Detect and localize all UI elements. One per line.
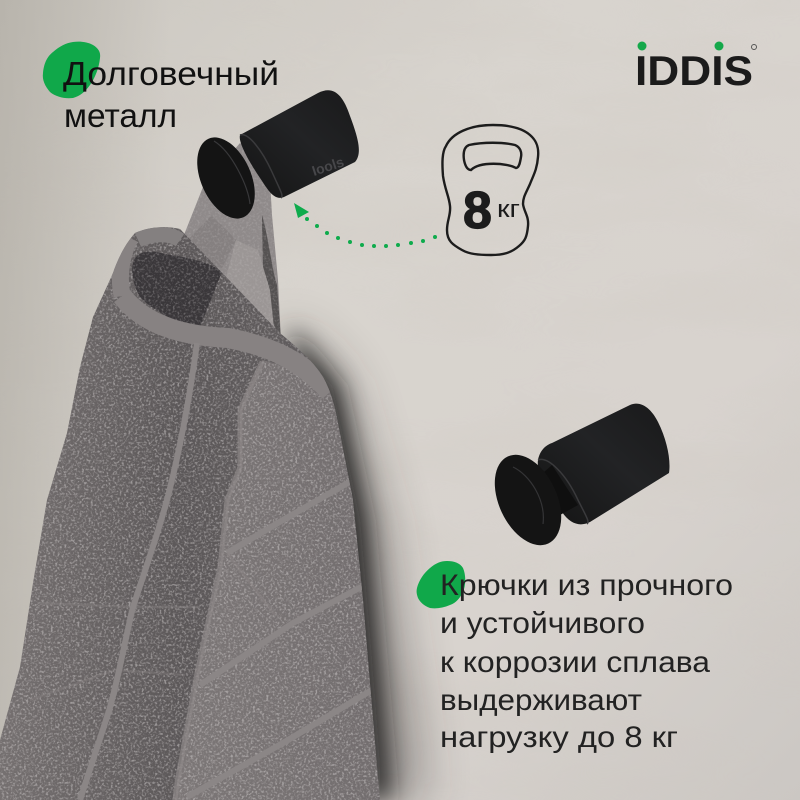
- green blob: [43, 42, 100, 98]
- towel hem: [122, 296, 330, 392]
- icon: kettlebell 8 kg: [442, 125, 538, 255]
- heading: durable metal: Долговечный: [63, 55, 279, 92]
- logo: IDDIS: IDDIS: [635, 47, 753, 94]
- towel body: [0, 220, 400, 800]
- heading: durable metal: [43, 42, 279, 134]
- towel loop on hook: [176, 143, 281, 340]
- text block: hooks description: Крючки из прочного: [440, 569, 733, 602]
- towel inner fold: [132, 252, 222, 327]
- icon: kettlebell 8 kg: кг: [497, 196, 520, 223]
- hook logo: Iools: [310, 153, 346, 179]
- towel woven stripes: [30, 343, 372, 800]
- text block: hooks description: и устойчивого: [440, 607, 645, 640]
- arrow: dotted green: [294, 203, 437, 248]
- text block: hooks description: к коррозии сплава: [440, 646, 710, 679]
- text block: hooks description: нагрузку до 8 кг: [440, 721, 678, 754]
- towel: [0, 220, 400, 800]
- 8 kg label: 8: [463, 182, 492, 240]
- green blob: [417, 561, 465, 608]
- heading: durable metal: металл: [64, 97, 177, 134]
- towel shadow on wall: [285, 320, 425, 800]
- text block: hooks description: [417, 561, 733, 754]
- towel fold edge: [175, 362, 262, 800]
- hook: lower: [481, 404, 670, 556]
- text block: hooks description: выдерживают: [440, 684, 642, 717]
- hook: upper: [186, 90, 359, 227]
